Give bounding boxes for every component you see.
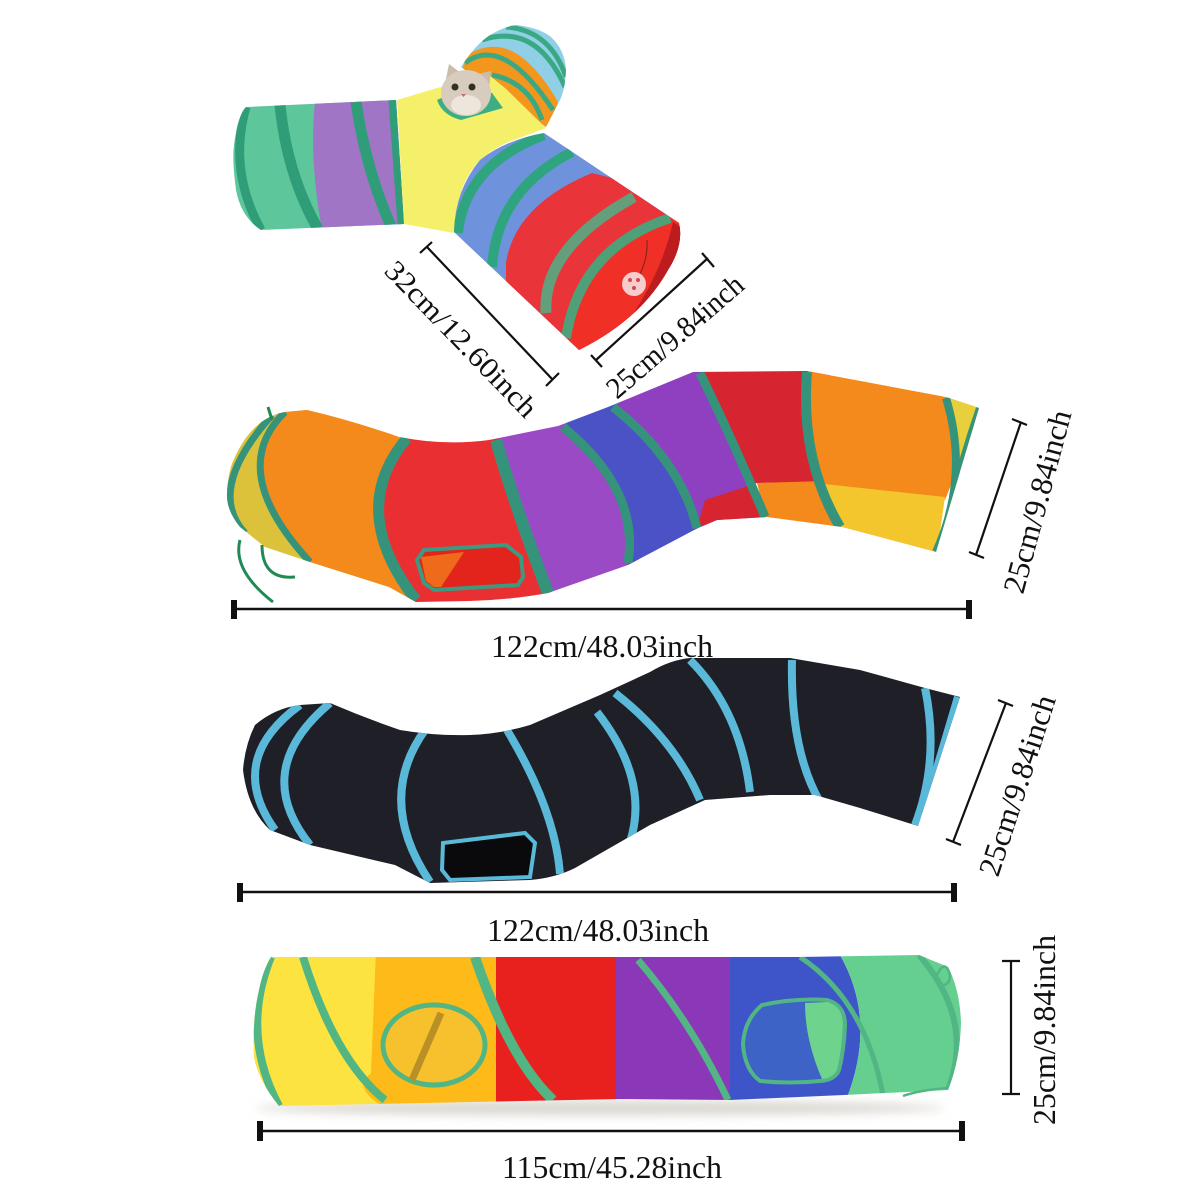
- dimension: black S length: 122cm/48.03inch: [487, 912, 709, 948]
- body: [235, 650, 970, 890]
- dimension: straight width: [1002, 935, 1062, 1125]
- tunnel mouth: [566, 218, 680, 350]
- dimension: black S length: [237, 883, 957, 948]
- blue ribs: [255, 660, 958, 882]
- hanging strings: [239, 407, 295, 602]
- shadow: [255, 1101, 945, 1115]
- tie loops: [903, 966, 950, 1096]
- dimension: straight width: 25cm/9.84inch: [1026, 935, 1062, 1125]
- green spirals and rims: [257, 955, 957, 1106]
- straight rainbow tunnel: [245, 950, 970, 1115]
- green rim bands: [230, 372, 979, 600]
- toy ball: [622, 240, 647, 296]
- dimension: 25cm mouth: 25cm/9.84inch: [600, 268, 751, 405]
- right arm: [454, 133, 680, 350]
- Y-shaped rainbow tunnel: [225, 20, 700, 360]
- black S-shaped tunnel: [235, 650, 970, 890]
- dimension: rainbow S length: 122cm/48.03inch: [491, 628, 713, 664]
- yellow hub: [397, 75, 546, 233]
- colour sections: [254, 955, 961, 1106]
- window: [417, 545, 523, 590]
- round window: [383, 1005, 485, 1085]
- dimension: rainbow S length: [231, 600, 972, 664]
- left arm: [233, 100, 404, 230]
- square window: [743, 1000, 845, 1082]
- dimension: straight length: 115cm/45.28inch: [502, 1149, 722, 1185]
- dimension: rainbow S width: 25cm/9.84inch: [996, 406, 1079, 597]
- tunnel body segments: [220, 365, 985, 610]
- cat face: [441, 64, 491, 116]
- dimension: black S width: 25cm/9.84inch: [971, 690, 1063, 880]
- window: [442, 833, 535, 880]
- rainbow S-shaped tunnel: [220, 365, 985, 610]
- hole in hub: [437, 85, 503, 120]
- top arm: [461, 25, 566, 127]
- dimension: straight length: [257, 1121, 965, 1185]
- dimension: 32cm length: 32cm/12.60inch: [378, 255, 544, 425]
